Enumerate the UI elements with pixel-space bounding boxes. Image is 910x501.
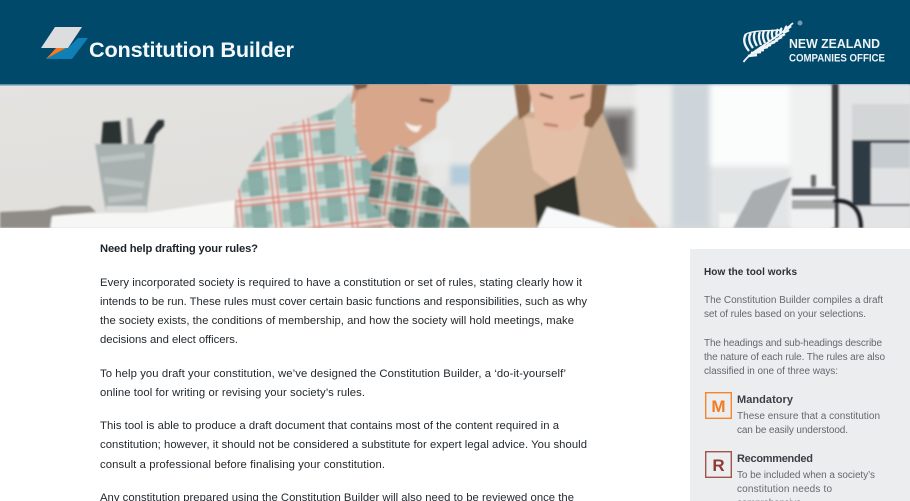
paragraph: incorporated society requirement: decisions and elect officers.	[100, 334, 238, 346]
paragraph: legal advice	[100, 420, 587, 471]
recommended entry: constitution needs to	[737, 484, 832, 495]
recommended entry: To be included when a society’s	[737, 470, 875, 481]
sidebar intro text: The headings and sub-headings describe	[704, 338, 882, 349]
hero photo	[0, 84, 910, 228]
recommended entry	[737, 453, 875, 501]
mandatory entry: Mandatory	[737, 394, 794, 406]
paragraph: incorporated society requirement: the society exists, the conditions of membership, and how the society will hold meetings, make	[100, 315, 574, 327]
sidebar intro text: the nature of each rule. The rules are also	[704, 352, 885, 363]
paragraph: incorporated society requirement: Every incorporated society is required to have a constitution or set of rules, stating clearly how it	[100, 277, 583, 289]
icon: silver fern	[744, 23, 793, 62]
icon: R badge	[706, 452, 731, 477]
sidebar intro text: The Constitution Builder compiles a draft	[704, 295, 883, 306]
header bar	[0, 0, 910, 84]
NZ Companies Office wordmark: NEW ZEALAND	[789, 37, 880, 51]
sidebar intro text: set of rules based on your selections.	[704, 309, 866, 320]
photo: bucket of knives	[95, 118, 164, 213]
photo background: kitchen	[420, 84, 832, 228]
photo: counter and book	[0, 200, 235, 228]
paragraph: legal advice: constitution; however, it should not be considered a substitute for expert legal advice. You should	[100, 439, 587, 451]
mandatory entry	[737, 394, 880, 436]
paragraph: about the builder: To help you draft your constitution, we’ve designed the Constitution Builder, a ‘do-it-yourself’	[100, 368, 566, 380]
recommended entry: Recommended	[737, 453, 813, 465]
panel: how the tool works	[690, 249, 910, 501]
photo: woman in cardigan	[470, 84, 658, 228]
paragraph: incorporated society requirement	[100, 277, 587, 346]
sidebar intro text	[704, 295, 885, 377]
photo: laptop, cup and french press	[719, 175, 861, 228]
sidebar heading: How the tool works	[704, 267, 797, 278]
icon: Constitution Builder logo	[41, 27, 88, 59]
NZ Companies Office wordmark	[789, 37, 885, 64]
mandatory entry: These ensure that a constitution	[737, 411, 880, 422]
main text column	[100, 243, 587, 501]
icon: R badge: R	[712, 456, 725, 475]
heading: need help: Need help drafting your rules?	[100, 243, 258, 255]
photo: fridge	[832, 84, 910, 228]
mandatory entry: can be easily understood.	[737, 425, 848, 436]
photo: man in plaid shirt	[234, 84, 472, 228]
paragraph: about the builder	[100, 368, 566, 399]
trademark mark	[798, 20, 802, 26]
paragraph: legal advice: This tool is able to produce a draft document that contains most of the content required in a	[100, 420, 560, 432]
paragraph: about the builder: online tool for writing or revising your society’s rules.	[100, 387, 365, 399]
NZ Companies Office wordmark: COMPANIES OFFICE	[789, 52, 885, 64]
icon: M badge	[706, 393, 731, 418]
sidebar intro text: classified in one of three ways:	[704, 366, 838, 377]
title: Constitution Builder	[89, 37, 295, 62]
paragraph: legal advice: consult a professional before finalising your constitution.	[100, 459, 385, 471]
icon: M badge: M	[711, 397, 726, 416]
paragraph: incorporated society requirement: intends to be run. These rules must cover certain basic functions and responsibilities, such as why	[100, 296, 587, 308]
